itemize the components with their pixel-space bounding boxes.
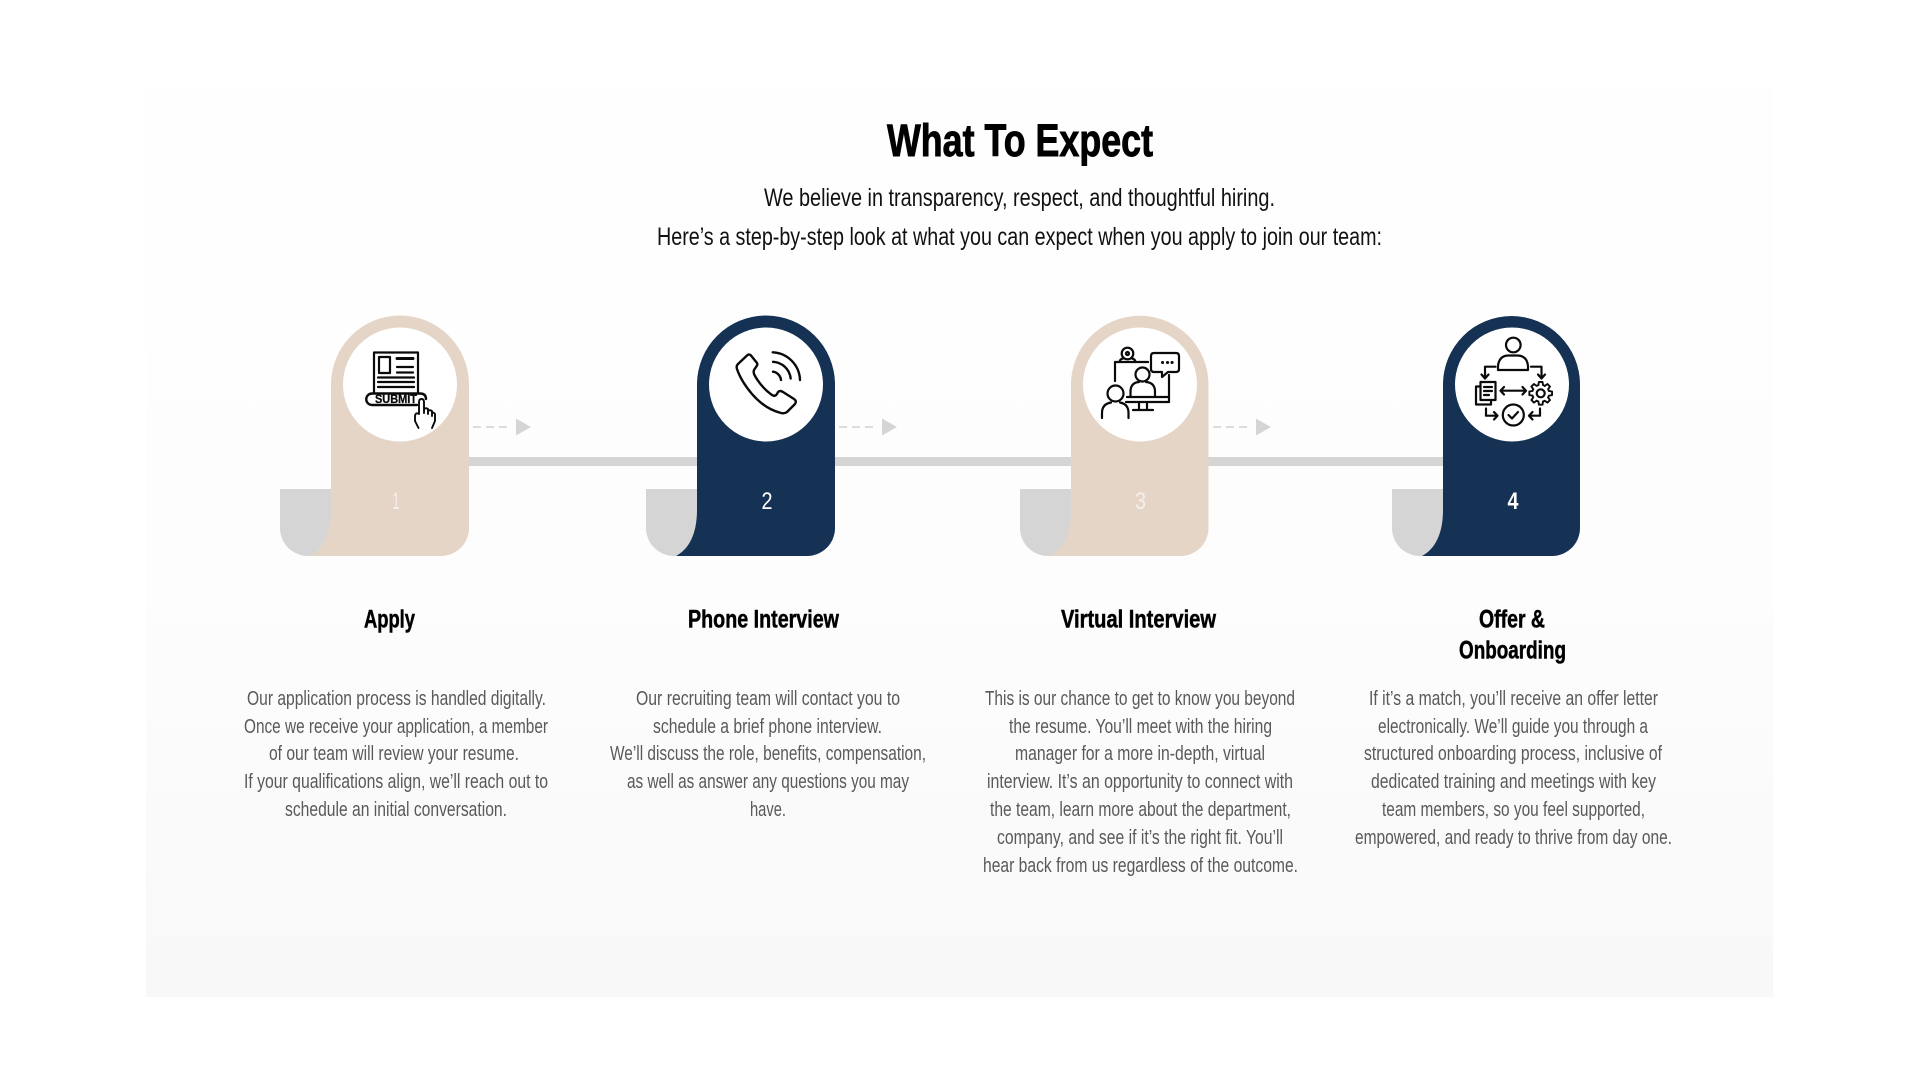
panel: background	[146, 85, 1773, 997]
step 3 badge: 3	[1135, 488, 1146, 515]
step 4 description: empowered, and ready to thrive from day one.	[1355, 827, 1672, 849]
step 1 description: Once we receive your application, a member	[244, 716, 548, 738]
step 2 description: schedule a brief phone interview.	[653, 716, 882, 738]
subtitle: We believe in transparency, respect, and thoughtful hiring.	[764, 184, 1275, 212]
step 3 description: hear back from us regardless of the outcome.	[983, 855, 1298, 877]
step 4 description: structured onboarding process, inclusive of	[1364, 743, 1662, 765]
step 2 description: as well as answer any questions you may	[627, 771, 909, 793]
step 2 description: Our recruiting team will contact you to	[636, 688, 900, 710]
step 3 description	[983, 688, 1298, 877]
step 3 description: company, and see if it’s the right fit. You’ll	[997, 827, 1283, 849]
icon: virtual interview	[1102, 348, 1179, 418]
step 1 description: of our team will review your resume.	[269, 743, 519, 765]
icon: submit form: SUBMIT	[375, 392, 418, 406]
step 4 heading: Offer &	[1479, 606, 1545, 634]
step 3 description: This is our chance to get to know you beyond	[985, 688, 1295, 710]
step 4 description: team members, so you feel supported,	[1382, 799, 1645, 821]
icon: telephone	[737, 352, 800, 413]
timeline connector line	[460, 457, 1450, 466]
arrow 1	[473, 418, 531, 436]
title: What To Expect	[887, 115, 1153, 166]
step 4 badge: 4	[1508, 488, 1519, 515]
step 3 description: interview. It’s an opportunity to connect with	[987, 771, 1293, 793]
step 1 heading: Apply	[364, 606, 415, 634]
step 4 description: electronically. We’ll guide you through a	[1378, 716, 1649, 738]
step 2 badge: 2	[762, 488, 772, 515]
step 1 description: schedule an initial conversation.	[285, 799, 507, 821]
step 4 heading	[1459, 606, 1566, 664]
step 4 description	[1355, 688, 1672, 849]
step 2 description: have.	[750, 799, 786, 821]
step 3 heading: Virtual Interview	[1061, 606, 1216, 634]
step 4 badge	[1392, 316, 1580, 556]
subtitle	[657, 184, 1382, 251]
step 2 badge	[646, 316, 835, 556]
icon: onboarding workflow	[1476, 338, 1552, 426]
step 2 heading: Phone Interview	[688, 606, 839, 634]
step 1 badge: 1	[392, 488, 400, 515]
subtitle: Here’s a step-by-step look at what you can expect when you apply to join our team:	[657, 223, 1382, 251]
step 2 description	[610, 688, 926, 821]
step 1 description: If your qualifications align, we’ll reach out to	[244, 771, 548, 793]
step 4 description: If it’s a match, you’ll receive an offer letter	[1369, 688, 1658, 710]
arrow 2	[839, 418, 897, 436]
step 3 badge	[1020, 316, 1208, 556]
step 4 heading: Onboarding	[1459, 636, 1566, 664]
arrow 3	[1213, 418, 1271, 436]
step 1 badge	[280, 316, 469, 556]
step 3 description: the resume. You’ll meet with the hiring	[1009, 716, 1272, 738]
step 3 description: the team, learn more about the department,	[990, 799, 1291, 821]
step 3 description: manager for a more in-depth, virtual	[1015, 743, 1265, 765]
step 4 description: dedicated training and meetings with key	[1371, 771, 1656, 793]
step 1 description: Our application process is handled digitally.	[247, 688, 546, 710]
step 1 description	[244, 688, 548, 821]
step 2 description: We’ll discuss the role, benefits, compensation,	[610, 743, 926, 765]
icon: submit form	[366, 352, 435, 428]
